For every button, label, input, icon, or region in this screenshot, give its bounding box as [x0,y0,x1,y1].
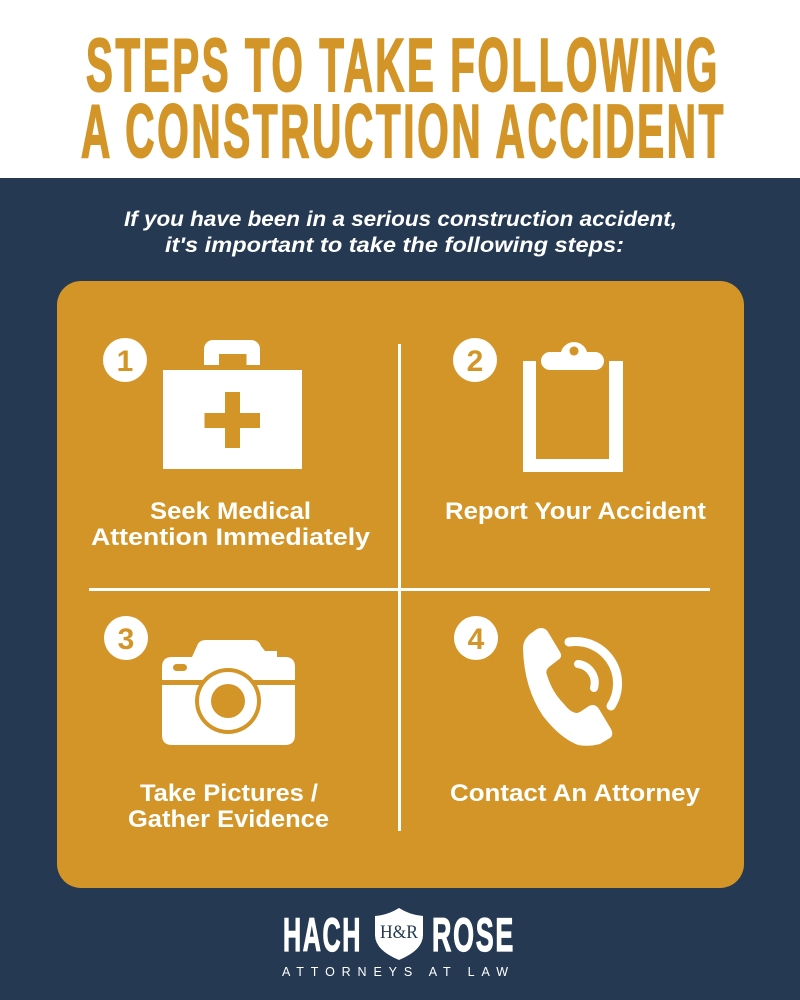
title [81,23,726,173]
step 2 [445,338,706,525]
step 1 [91,338,371,551]
shield emblem [375,908,423,960]
icon: phone [523,628,618,746]
number badge 2: 2 [467,345,483,378]
number badge 4 [454,616,498,660]
number badge 1: 1 [117,345,133,378]
icon: first aid kit [163,340,302,469]
number badge 3 [104,616,148,660]
icon: clipboard [523,342,623,472]
label: contact an attorney: Contact An Attorney [450,780,701,807]
step 3 [104,616,329,833]
number badge 2 [453,338,497,382]
intro text: If you have been in a serious construction accident, [124,208,677,231]
number badge 4: 4 [468,623,485,656]
label: take pictures: Take Pictures / [140,780,318,807]
label: take pictures: Gather Evidence [128,806,329,833]
label: seek medical attention: Seek Medical [150,498,311,525]
number badge 3: 3 [118,623,134,656]
panel: steps [57,281,744,888]
label: report your accident: Report Your Accident [445,498,706,525]
intro text: it's important to take the following steps: [165,234,624,257]
icon: camera [162,640,295,745]
logo: Hach & Rose: HACH [283,908,362,961]
label: seek medical attention: Attention Immediately [91,524,371,551]
logo: Hach & Rose: ROSE [432,908,515,961]
logo: Hach & Rose: ATTORNEYS AT LAW [282,965,508,979]
logo: Hach & Rose [282,908,515,979]
intro text [124,208,677,257]
number badge 1 [103,338,147,382]
shield emblem: H&R [380,922,418,943]
label: take pictures [128,780,329,833]
step 4 [450,616,701,807]
label: seek medical attention [91,498,371,551]
